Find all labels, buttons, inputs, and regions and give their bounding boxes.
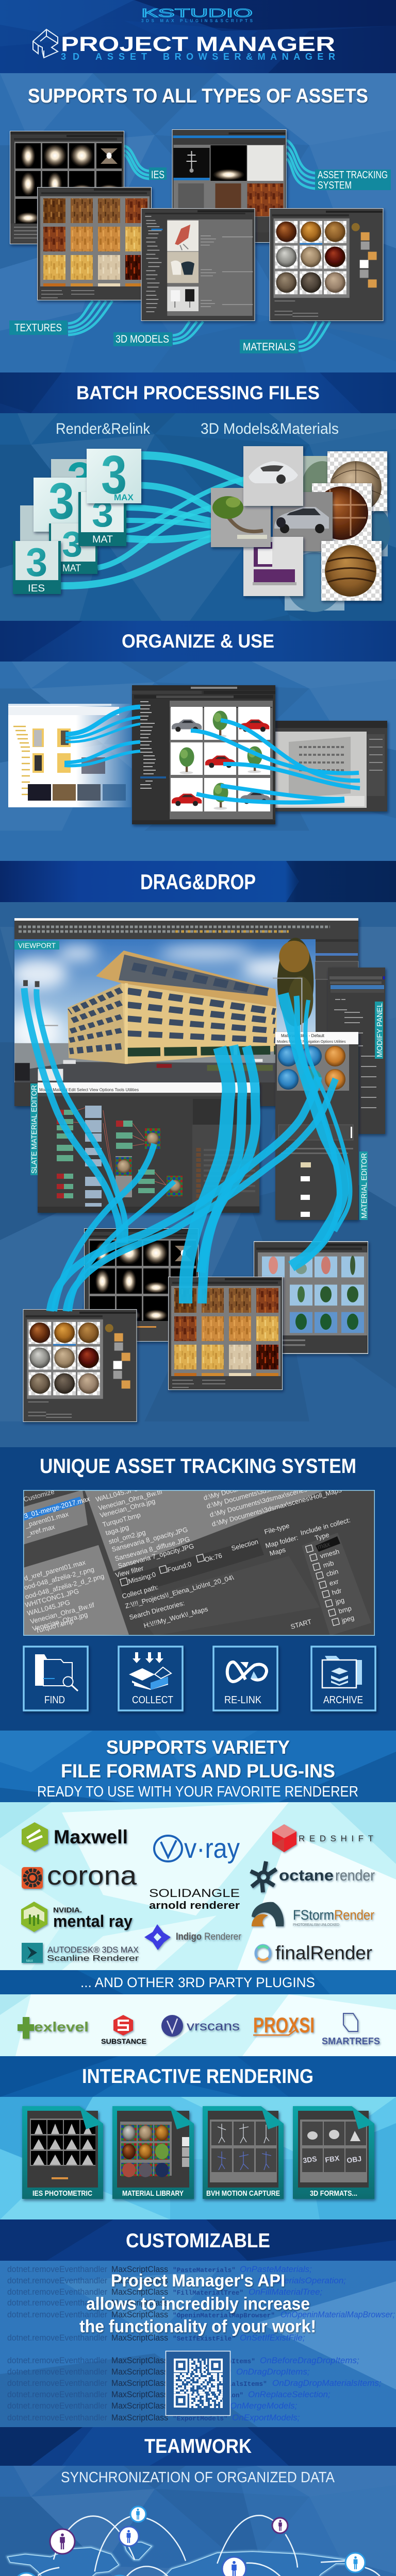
screenshot: rotated asset tracker UI	[23, 1468, 375, 1636]
screenshot: rotated asset tracker UI: Sansevaria 7_opacity.JPG	[117, 1542, 195, 1570]
screenshot: rotated asset tracker UI: TurquoT.bmp	[35, 1617, 74, 1635]
screenshot: rotated asset tracker UI: Include in collect:	[300, 1516, 351, 1537]
logo: smartrefs: SMARTREFS	[322, 2036, 380, 2046]
screenshot: rotated asset tracker UI: d:\My Documents\3dsmax\scenes\	[203, 1468, 304, 1502]
code background: "PasteMaterials"	[173, 2266, 236, 2274]
logo: redshift: REDSHIFT	[299, 1834, 373, 1843]
screenshot: rotated asset tracker UI: ood-048_afzelia-2_r.png	[23, 1565, 95, 1591]
screenshot: rotated asset tracker UI: Map folder:	[265, 1534, 299, 1550]
panel: interactive rendering	[0, 2056, 396, 2219]
screenshot: rotated asset tracker UI: _parent01.max	[24, 1510, 70, 1529]
screenshot: rotated asset tracker UI: Sansevaria 8_diffuse.JPG	[114, 1535, 191, 1563]
heading: SUPPORTS TO ALL TYPES OF ASSETS	[28, 85, 368, 107]
band: other 3rd party plugins: ... AND OTHER 3RD PARTY PLUGINS	[80, 1975, 315, 1990]
code background: "SetIfExistFile"	[173, 2335, 236, 2343]
subheading: SYNCHRONIZATION OF ORGANIZED DATA	[61, 2469, 335, 2486]
logo: 3ds max scanline: Scanline Renderer	[47, 1954, 139, 1963]
screenshot: rotated asset tracker UI: 3_01-merge-2017.max	[23, 1495, 91, 1520]
subtitle: 3D asset browser and manager: 3D	[61, 52, 79, 62]
logo: fstorm render: PHOTOREALISM UNLOCKED	[293, 1923, 339, 1927]
label: IES: IES	[151, 169, 164, 181]
logo: mental ray	[21, 1902, 133, 1932]
caption: models and materials: 3D Models&Materials	[201, 420, 339, 437]
card: 3D formats: FBX	[324, 2154, 340, 2164]
card: 3D formats: 3DS	[302, 2155, 318, 2164]
screenshot: textures window	[37, 188, 152, 300]
code background: "FillMaterialTree"	[173, 2289, 243, 2297]
code background: dotnet.removeEventhandler	[7, 2298, 107, 2308]
heading line 2: FILE FORMATS AND PLUG-INS	[61, 1760, 335, 1782]
logo: substance: SUBSTANCE	[101, 2037, 146, 2045]
viewport building	[14, 938, 314, 1087]
API text: the functionality of your work!	[79, 2317, 316, 2336]
logo: fstorm render	[252, 1902, 374, 1927]
image: silver car	[273, 492, 333, 551]
screenshot: viewport window	[10, 918, 358, 1106]
logo: octane render: render	[335, 1867, 375, 1884]
screenshot: rotated asset tracker UI: WALL045.JPG	[26, 1598, 71, 1617]
image: sphere top	[327, 451, 387, 513]
code background: MaxScriptClass	[111, 2413, 168, 2422]
QR code	[166, 2351, 230, 2415]
code background: OnDragDropMaterialsItems;	[272, 2378, 382, 2388]
panel: teamwork	[0, 2427, 396, 2576]
code background: MaxScriptClass	[111, 2355, 168, 2365]
icon: MAX file front: MAX	[114, 493, 134, 502]
card: material library: MATERIAL LIBRARY	[122, 2189, 184, 2198]
caption: render and relink: Render&Relink	[56, 420, 151, 437]
label: asset tracking system: SYSTEM	[318, 180, 352, 191]
code background: MaxScriptClass	[111, 2287, 168, 2297]
code background: MaxScriptClass	[111, 2389, 168, 2399]
ribbons	[64, 707, 360, 803]
code background: OnSetIfExistFile;	[240, 2333, 305, 2343]
button: archive	[311, 1647, 375, 1710]
card: 3D formats: OBJ	[346, 2154, 362, 2164]
button: archive: ARCHIVE	[323, 1694, 363, 1706]
screenshot: rotated asset tracker UI: d:\My Documents\3dsmax\scenes\Holl_Maps	[211, 1486, 342, 1528]
subtitle: 3D asset browser and manager: BROWSER&MANAGER	[163, 52, 335, 62]
screenshot: modify panel window	[328, 968, 385, 1134]
code background: "DragDropMaterialsItems"	[173, 2380, 267, 2388]
button: find	[24, 1647, 88, 1710]
screenshot: materials window	[23, 1309, 137, 1422]
code background: "ReplaceSelection"	[173, 2392, 243, 2399]
code background: dotnet.removeEventhandler	[7, 2276, 107, 2285]
icon: MAX file	[34, 472, 87, 532]
screenshot: rotated asset tracker UI: _xref.max	[25, 1523, 56, 1538]
panel: supports all asset types	[0, 73, 396, 382]
viewport clouds	[14, 939, 282, 1046]
code background: MaxScriptClass	[111, 2378, 168, 2388]
icon: IES file: IES	[28, 583, 45, 594]
logo: octane render: octane	[279, 1867, 334, 1884]
heading: DRAG&DROP	[140, 870, 256, 894]
screenshot: rotated asset tracker UI: Collect path:	[121, 1583, 159, 1600]
screenshot: rotated asset tracker UI: Sansevaria 8_opacity.JPG	[111, 1526, 189, 1553]
screenshot: trees window	[254, 1242, 368, 1353]
screenshot: rotated asset tracker UI: bmp	[338, 1604, 352, 1615]
screenshot: project manager window	[132, 685, 275, 824]
screenshot: 3ds max scene	[274, 721, 387, 811]
code background: dotnet.removeEventhandler	[7, 2367, 107, 2377]
icon: MAT file front: 3	[92, 494, 113, 535]
code background: OnMergeModels;	[230, 2401, 298, 2411]
card: 3D formats: 3D FORMATS...	[310, 2189, 357, 2198]
logo: corona: corona	[47, 1861, 137, 1891]
screenshot: rotated asset tracker UI: jpeg	[340, 1614, 355, 1624]
logo: mental ray: NVIDIA.	[53, 1906, 82, 1914]
screenshot: rotated asset tracker UI: cbin	[325, 1567, 339, 1578]
code background: OnPasteMaterials;	[240, 2264, 312, 2274]
icon: MAT file back: MAT	[62, 563, 81, 574]
logo: indigo renderer: Indigo	[176, 1931, 202, 1942]
logo: smartrefs	[322, 2013, 380, 2046]
code background: "BeforeDragDropItems"	[173, 2358, 255, 2365]
image: sofa	[243, 537, 303, 596]
logo: proxsi: PROXSI	[253, 2013, 315, 2037]
icon: MAX file: MAX	[60, 522, 77, 531]
logo: indigo renderer: Renderer	[204, 1931, 242, 1942]
panel: organize and use	[0, 621, 396, 861]
label: modify panel: MODIFY PANEL	[375, 1003, 384, 1057]
logo: octane render	[251, 1861, 375, 1892]
logo: fstorm render: FStorm	[293, 1907, 334, 1923]
screenshot: rotated asset tracker UI: Venecian_Ohra.jpg	[31, 1611, 89, 1633]
button: re-link: RE-LINK	[224, 1694, 262, 1706]
ribbons	[68, 140, 330, 351]
screenshot: rotated asset tracker UI: WHITCONC1.JPG	[24, 1587, 80, 1609]
card: 3D formats	[293, 2106, 374, 2199]
label: slate material editor: SLATE MATERIAL EDITOR	[30, 1085, 39, 1174]
screenshot: rotated asset tracker UI: Ok:76	[204, 1551, 223, 1564]
panel: customizable	[0, 2219, 396, 2427]
screenshot: rotated asset tracker UI: Z:\!!!_Projects\!_Elena_Lio\Int_20_04\	[124, 1573, 235, 1610]
person nodes	[14, 2506, 372, 2576]
screenshot: rotated asset tracker UI: jpg	[334, 1596, 345, 1606]
heading: CUSTOMIZABLE	[126, 2230, 270, 2252]
panel: plugin logos	[0, 1994, 396, 2056]
image: concept car	[243, 446, 303, 506]
screenshot: rotated asset tracker UI: Missing:0	[127, 1570, 157, 1585]
panel: header	[0, 0, 396, 73]
logo: redshift	[272, 1824, 373, 1852]
screenshot: rotated asset tracker UI: taga.jpg	[105, 1523, 129, 1537]
panel: renderer logos	[0, 1802, 396, 1970]
screenshot: rotated asset tracker UI: ood-048_afzelia-2_d_2.png	[24, 1572, 105, 1601]
screenshot: rotated asset tracker UI: File-type	[263, 1522, 290, 1536]
code background: "DragDropItems"	[173, 2369, 232, 2377]
screenshot: explorer window	[8, 704, 131, 807]
screenshot: rotated asset tracker UI: d:\My Documents\3dsmax\scenes\Holl_Maps	[206, 1468, 337, 1510]
icon: MAT file front: MAT	[92, 534, 113, 545]
subtitle: 3D asset browser and manager	[61, 52, 335, 62]
screenshot: rotated asset tracker UI: Customize	[23, 1488, 55, 1503]
screenshot: IES window	[10, 131, 124, 244]
ribbons	[61, 455, 248, 586]
band: other 3rd party plugins	[0, 1970, 396, 1994]
logo: substance	[101, 2015, 146, 2045]
panel: supports variety heading	[0, 1731, 396, 1802]
code background: MaxScriptClass	[111, 2310, 168, 2319]
logo: v-ray	[154, 1833, 240, 1864]
screenshot: rotated asset tracker UI: Venecian_Ohra.jpg	[99, 1497, 156, 1519]
logo: vrscans: vrscans	[187, 2019, 240, 2033]
logo: v-ray: v·ray	[184, 1833, 240, 1864]
screenshot: material editor: Material Editor - Default	[281, 1033, 325, 1038]
screenshot: rotated asset tracker UI: Search Directories:	[128, 1599, 186, 1621]
logo: Maxwell	[22, 1822, 128, 1851]
image: bonsai tree	[211, 488, 271, 547]
label: textures: TEXTURES	[14, 322, 62, 334]
code background: OnBeforeDragDropItems;	[260, 2355, 359, 2365]
code background: dotnet.removeEventhandler	[7, 2264, 107, 2274]
logo: indigo renderer	[144, 1924, 242, 1950]
logo: 3ds max scanline: MAX	[26, 1960, 33, 1963]
screenshot: rotated asset tracker UI: hdr	[331, 1586, 343, 1597]
code background: "ExportModels"	[173, 2415, 228, 2422]
code background: OnExportModels;	[232, 2413, 300, 2422]
code background: dotnet.removeEventhandler	[7, 2287, 107, 2297]
logo: solid angle arnold: arnold renderer	[149, 1900, 240, 1911]
logo: solid angle arnold: SOLIDANGLE	[149, 1887, 240, 1900]
screenshot: IES window	[85, 1228, 198, 1342]
heading: INTERACTIVE RENDERING	[82, 2065, 314, 2088]
subtitle: 3D asset browser and manager: ASSET	[95, 52, 147, 62]
code background: MaxScriptClass	[111, 2264, 168, 2274]
card: IES photometric	[22, 2106, 103, 2199]
background asset tiles	[20, 453, 390, 612]
screenshot: 3D models window	[141, 208, 255, 321]
screenshot: rotated asset tracker UI: START	[290, 1618, 312, 1631]
logo: KSTUDIO	[141, 6, 253, 23]
panel: unique asset tracking system	[0, 1447, 396, 1731]
icon: MAT file front	[78, 492, 126, 546]
logo: mental ray: mental ray	[53, 1912, 133, 1930]
code background: "MergeModels"	[173, 2403, 224, 2411]
code background: MaxScriptClass	[111, 2401, 168, 2411]
logo: vrscans	[161, 2015, 240, 2037]
screenshot: materials window	[270, 208, 383, 321]
screenshot: rotated asset tracker UI: TurquoT.bmp	[102, 1511, 141, 1529]
button: find: FIND	[44, 1694, 65, 1706]
ribbons	[24, 988, 351, 1311]
API text: Project Manager's API	[111, 2271, 285, 2291]
label: material editor: MATERIAL EDITOR	[360, 1153, 369, 1218]
logo: exlevel: exlevel	[34, 2019, 89, 2035]
icon: MAX file front: 3	[101, 445, 127, 505]
card: BVH motion capture: BVH MOTION CAPTURE	[206, 2189, 280, 2198]
label: asset tracking system	[315, 170, 391, 191]
chart: world map with arcs	[8, 2515, 386, 2576]
logo: KSTUDIO: 3DS MAX PLUGINS&SCRIPTS	[141, 19, 253, 23]
logo: final render: finalRender	[275, 1942, 372, 1963]
code background: OnReplaceSelection;	[248, 2389, 331, 2399]
code background: OnMaterialsOperation;	[258, 2276, 346, 2285]
code background: dotnet.removeEventhandler	[7, 2401, 107, 2411]
button: re-link	[213, 1647, 277, 1710]
code background: dotnet.removeEventhandler	[7, 2378, 107, 2388]
API text: allows to incredibly increase	[86, 2294, 310, 2314]
code background: MaxScriptClass	[111, 2298, 168, 2308]
heading line 1: SUPPORTS VARIETY	[106, 1737, 290, 1758]
card: IES photometric: IES PHOTOMETRIC	[32, 2189, 92, 2198]
screenshot: material editor	[275, 1032, 358, 1220]
screenshot: rotated asset tracker UI: Selection	[230, 1538, 259, 1552]
screenshot: rotated asset tracker UI: d:\My Documents\3dsmax\scenes\Holl_Maps	[209, 1477, 340, 1519]
image: sphere bottom	[321, 541, 382, 601]
logo: solid angle arnold	[149, 1887, 240, 1911]
label: materials: MATERIALS	[243, 341, 295, 353]
logo: fstorm render: Render	[334, 1907, 374, 1923]
screenshot: rotated asset tracker UI: Maps	[269, 1546, 287, 1557]
logo: KSTUDIO: KSTUDIO	[141, 6, 253, 20]
heading: TEAMWORK	[144, 2435, 252, 2458]
screenshot: rotated asset tracker UI: vmesh	[319, 1547, 340, 1560]
API text	[79, 2271, 316, 2336]
icon: MAX file front	[87, 445, 141, 505]
screenshot: rotated asset tracker UI: Found:0	[167, 1560, 192, 1574]
title: PROJECT MANAGER: PROJECT MANAGER	[61, 33, 335, 56]
screenshot: rotated asset tracker UI: Venecian_Ohra_Bw.tif	[29, 1601, 95, 1625]
logo: Maxwell: Maxwell	[54, 1826, 128, 1848]
screenshot: rotated asset tracker UI: mib	[322, 1559, 335, 1569]
screenshot: asset tracking window	[172, 130, 286, 242]
code background: "OpeninMaterialMapBrowser"	[173, 2312, 275, 2319]
code background: dotnet.removeEventhandler	[7, 2333, 107, 2343]
screenshot: rotated asset tracker UI: Venecian_Ohra_Bw.tif	[97, 1487, 163, 1512]
icon: IES file: 3	[26, 539, 47, 585]
screenshot: rotated asset tracker UI: d_xref_parent01.max	[23, 1558, 87, 1582]
label: viewport: VIEWPORT	[18, 941, 56, 950]
code background: OnDragDropItems;	[236, 2367, 310, 2377]
code background: OnFillMaterialTree;	[249, 2287, 323, 2297]
heading: ORGANIZE & USE	[122, 631, 274, 652]
code background: MaxScriptClass	[111, 2276, 168, 2285]
subheading: READY TO USE WITH YOUR FAVORITE RENDERER	[37, 1784, 358, 1800]
screenshot: rotated asset tracker UI: max	[317, 1540, 331, 1551]
screenshot: rotated asset tracker UI: stol_om2.jpg	[108, 1528, 146, 1546]
logo: 3ds max scanline: AUTODESK® 3DS MAX	[47, 1945, 139, 1955]
code background: dotnet.removeEventhandler	[7, 2355, 107, 2365]
card: material library	[112, 2106, 194, 2199]
icon: IES file	[13, 539, 61, 594]
button: collect	[119, 1647, 183, 1710]
heading: BATCH PROCESSING FILES	[76, 382, 320, 403]
logo: exlevel	[18, 2017, 89, 2039]
image: sphere middle	[312, 483, 372, 543]
screenshot: rotated asset tracker UI: WALL045.JPG	[95, 1484, 139, 1503]
code background: MaxScriptClass	[111, 2367, 168, 2377]
background asset tiles: 3	[67, 453, 93, 505]
panel: batch processing	[0, 372, 396, 682]
screenshot: rotated asset tracker UI: View filter	[114, 1564, 145, 1579]
heading: UNIQUE ASSET TRACKING SYSTEM	[40, 1455, 356, 1478]
screenshot: rotated asset tracker UI: H:\!!!My_Work\!_Maps	[143, 1605, 209, 1630]
code background	[7, 2264, 395, 2422]
icon: MAX file: 3	[48, 472, 74, 530]
icon: MAT file back: 3	[62, 524, 82, 564]
panel: drag and drop	[0, 861, 396, 1447]
screenshot: rotated asset tracker UI: Type	[314, 1531, 330, 1542]
screenshot: material editor: Modes Material Navigation Options Utilities	[277, 1040, 346, 1044]
code background: dotnet.removeEventhandler	[7, 2413, 107, 2422]
code background: MaxScriptClass	[111, 2333, 168, 2343]
icon: project manager cube	[33, 29, 58, 58]
icon: MAT file back	[49, 523, 97, 574]
screenshot: slate material editor: Modes Material Edit Select View Options Tools Utilities	[39, 1088, 139, 1092]
card: BVH motion capture	[203, 2106, 284, 2199]
button: collect: COLLECT	[132, 1694, 173, 1706]
code background: dotnet.removeEventhandler	[7, 2310, 107, 2319]
logo: 3ds max scanline	[22, 1943, 139, 1963]
screenshot: rotated asset tracker UI: exr	[328, 1578, 340, 1587]
screenshot: slate material editor	[38, 1082, 259, 1213]
screenshot: textures window	[168, 1277, 283, 1390]
label: 3D models: 3D MODELS	[116, 333, 169, 345]
code background: dotnet.removeEventhandler	[7, 2389, 107, 2399]
